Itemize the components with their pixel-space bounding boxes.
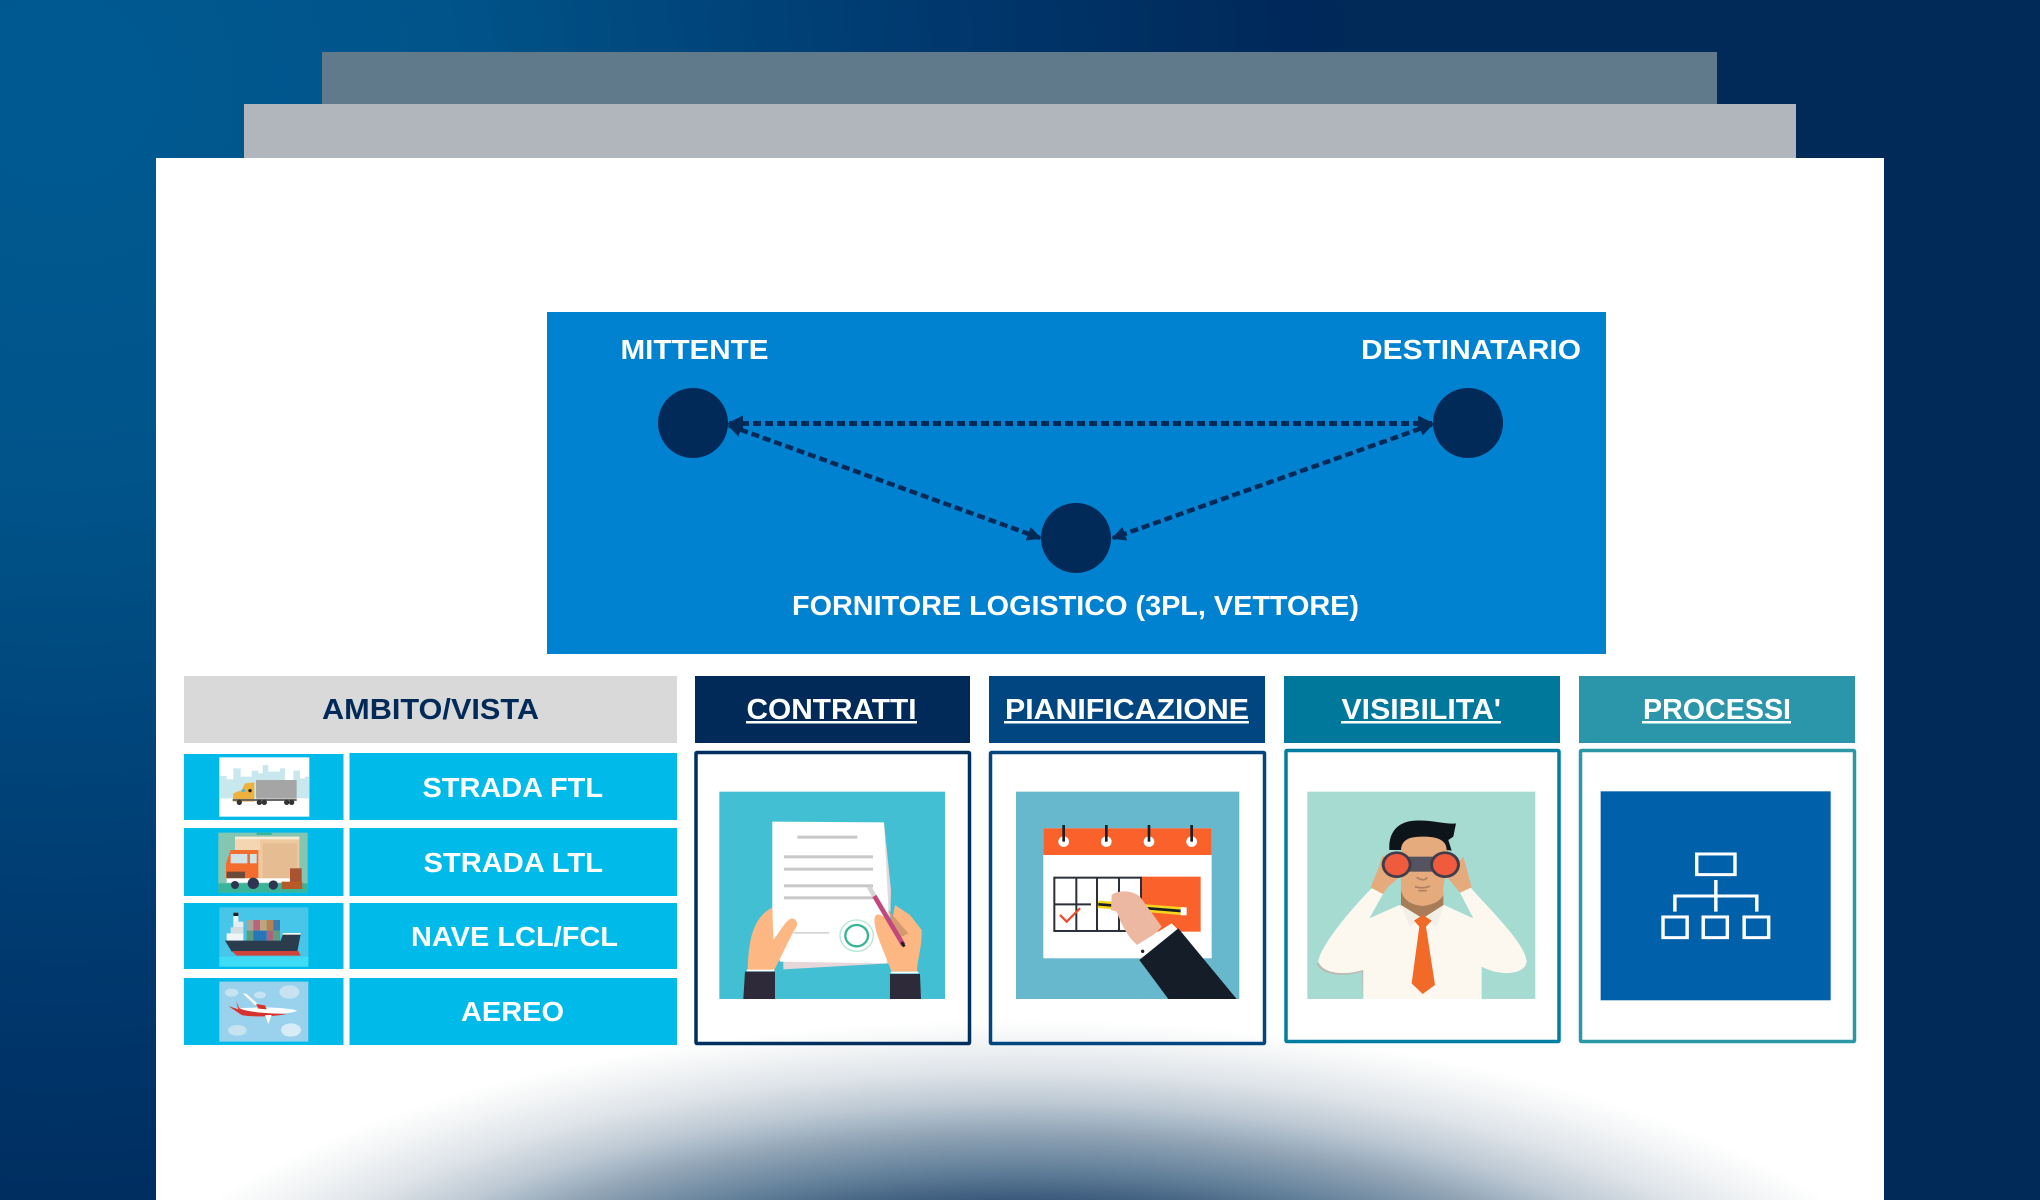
icon: delivery van with boxes — [218, 833, 308, 893]
middle sheet — [244, 104, 1796, 164]
panel: pianificazione — [990, 752, 1264, 1044]
panel: network diagram — [547, 312, 1606, 654]
header: contratti: CONTRATTI — [746, 694, 916, 726]
arrow: mittente to destinatario — [729, 421, 1432, 426]
icon: truck in city — [219, 757, 309, 817]
icon: container ship — [219, 907, 308, 967]
white main sheet — [156, 158, 1884, 1200]
header: visibilita — [1284, 676, 1560, 743]
panel: contratti — [696, 752, 970, 1044]
header: processi: PROCESSI — [1643, 694, 1791, 726]
row: nave lcl fcl: NAVE LCL/FCL — [411, 921, 618, 952]
illustration: signing a contract — [719, 792, 945, 999]
icon: airplane — [219, 982, 308, 1042]
label: destinatario: DESTINATARIO — [1361, 334, 1581, 365]
node: fornitore — [1041, 503, 1111, 573]
panel: visibilita — [1286, 750, 1559, 1042]
row: strada ftl: STRADA FTL — [422, 772, 603, 803]
header: pianificazione: PIANIFICAZIONE — [1005, 694, 1249, 726]
illustration: planning on a calendar — [1016, 792, 1239, 999]
label: mittente: MITTENTE — [620, 334, 768, 365]
row: strada ltl: STRADA LTL — [424, 847, 603, 878]
header: pianificazione — [989, 676, 1265, 743]
illustration: man with binoculars — [1307, 792, 1535, 999]
icon: org chart on blue — [1601, 791, 1831, 1000]
bottom glow — [220, 1005, 1820, 1200]
panel: processi — [1580, 750, 1854, 1042]
header: ambito vista — [184, 676, 677, 743]
row: aereo: AEREO — [461, 996, 564, 1027]
row: strada ltl — [184, 828, 677, 896]
header: contratti — [695, 676, 970, 743]
arrow: destinatario to fornitore — [1113, 424, 1432, 538]
row: aereo — [184, 978, 677, 1045]
header: visibilita: VISIBILITA' — [1342, 694, 1501, 726]
label: fornitore logistico: FORNITORE LOGISTICO (3PL, VETTORE) — [792, 590, 1359, 621]
header: ambito vista: AMBITO/VISTA — [322, 694, 539, 726]
node: mittente — [658, 388, 728, 458]
row: strada ftl — [184, 753, 677, 820]
node: destinatario — [1433, 388, 1503, 458]
row: nave lcl fcl — [184, 903, 677, 969]
back sheet — [322, 52, 1717, 112]
header: processi — [1579, 676, 1855, 743]
arrow: mittente to fornitore — [729, 426, 1040, 538]
